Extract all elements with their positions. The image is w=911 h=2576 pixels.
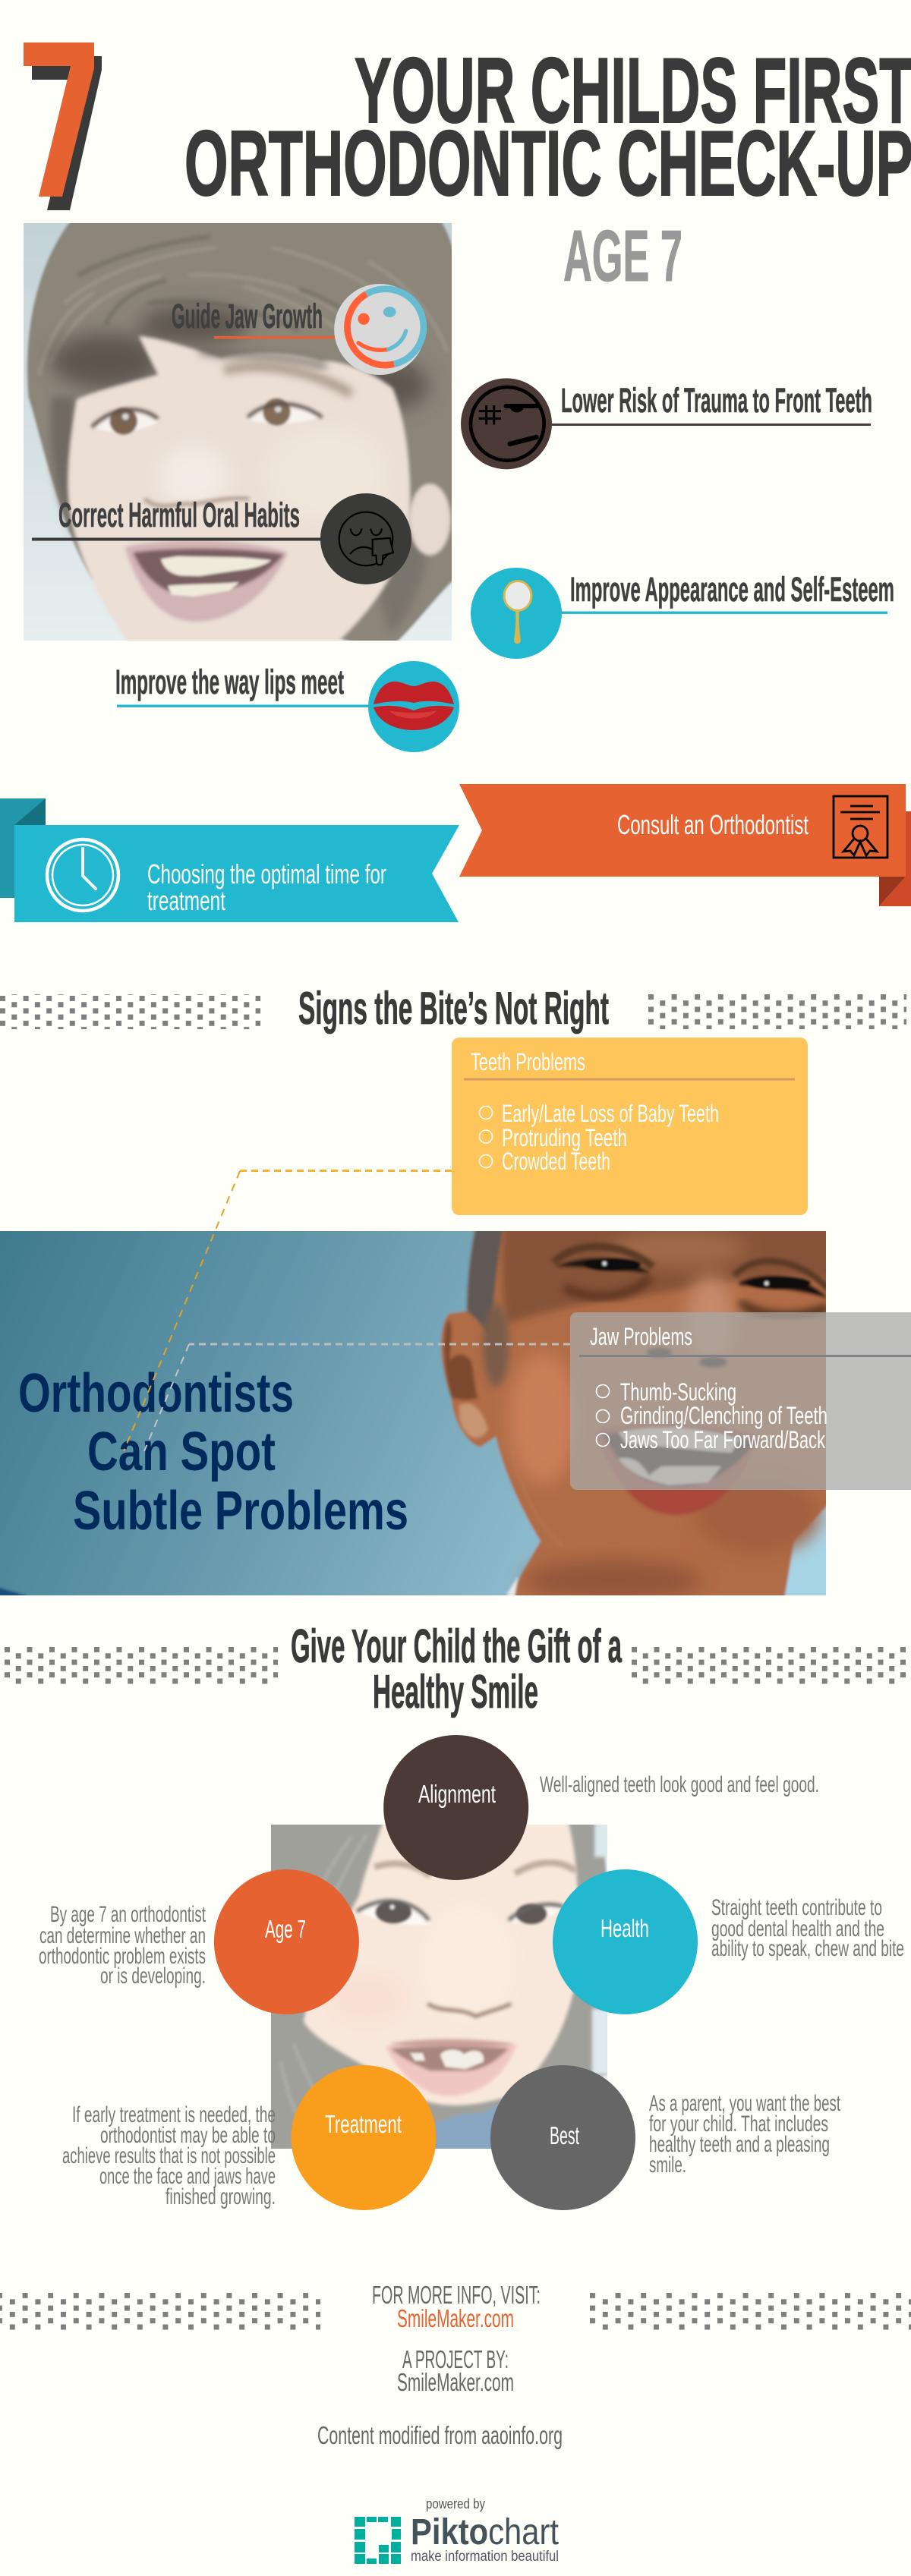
text: age 7 description: orthodontic problem exists: [39, 1944, 206, 1969]
heading: give your child the gift of a healthy smile: Give Your Child the Gift of a: [291, 1620, 622, 1673]
photo: boy: [0, 1216, 841, 1611]
logo: piktochart: powered by: [426, 2496, 485, 2511]
big number 7: [24, 43, 102, 210]
footer: more info: FOR MORE INFO, VISIT:: [372, 2281, 541, 2309]
text: treatment description: finished growing.: [165, 2184, 276, 2209]
footer: more info: SmileMaker.com: [397, 2304, 514, 2332]
footer dots: [0, 2293, 911, 2330]
item: improve the way lips meet: Improve the way lips meet: [115, 663, 344, 701]
bullet list: Thumb-Sucking: [620, 1378, 736, 1406]
item: improve the way lips meet: [115, 661, 459, 752]
mouth: [125, 540, 288, 622]
circle: alignment: [383, 1735, 528, 1880]
brows: [374, 1863, 430, 1876]
ribbon: choosing the optimal time: [0, 798, 459, 922]
nose and mouth: [595, 1274, 758, 1515]
circle: treatment: Treatment: [325, 2110, 402, 2138]
text: treatment description: once the face and jaws have: [99, 2164, 276, 2189]
bullet list: Grinding/Clenching of Teeth: [620, 1402, 827, 1429]
text: health description: [711, 1895, 904, 1961]
footer: content source: Content modified from aaoinfo.org: [317, 2421, 563, 2449]
bullet list: Crowded Teeth: [502, 1148, 610, 1175]
mouth: [386, 2039, 516, 2096]
circle: alignment: Alignment: [418, 1780, 496, 1808]
heading: signs the bite's not right: Signs the Bite’s Not Right: [298, 983, 609, 1034]
left eye: [92, 408, 159, 435]
logo: piktochart: make information beautiful: [411, 2549, 559, 2565]
text: best description: [649, 2091, 840, 2178]
footer: project credit: A PROJECT BY:: [402, 2345, 509, 2373]
icon: hurt face: [461, 378, 552, 469]
logo: piktochart: [355, 2496, 559, 2565]
text: age 7 description: [39, 1902, 206, 1989]
icon: thumbs down face: [320, 493, 411, 584]
photo caption: [18, 1363, 408, 1542]
text: best description: smile.: [649, 2152, 686, 2178]
item: improve appearance and self-esteem: [471, 568, 894, 659]
bullet list: Protruding Teeth: [502, 1124, 627, 1151]
item: correct harmful oral habits: [32, 493, 411, 584]
text: age 7 description: By age 7 an orthodontist: [50, 1902, 206, 1927]
ribbon: consult an orthodontist: Consult an Orthodontist: [617, 809, 809, 840]
photo caption: Subtle Problems: [73, 1481, 408, 1542]
circle: health: [553, 1869, 698, 2014]
ribbon: choosing the optimal time: Choosing the optimal time for: [147, 858, 386, 890]
icon: piktochart mark: [355, 2517, 401, 2564]
circle: age 7: Age 7: [265, 1915, 306, 1943]
text: treatment description: orthodontist may be able to: [100, 2123, 276, 2148]
panel: jaw problems: Jaw Problems: [590, 1323, 692, 1350]
right eye: [247, 398, 323, 426]
bullet list: [597, 1378, 827, 1453]
text: treatment description: If early treatment is needed, the: [72, 2102, 276, 2127]
ribbon: consult an orthodontist: [459, 784, 911, 906]
photo caption: Can Spot: [87, 1422, 276, 1482]
icon: hand mirror: [471, 568, 562, 659]
text: age 7 description: or is developing.: [100, 1963, 206, 1989]
circle: treatment: [292, 2065, 436, 2210]
footer: project credit: [397, 2345, 514, 2396]
text: treatment description: achieve results that is not possible: [62, 2143, 276, 2168]
title: [184, 39, 911, 215]
heading: give your child the gift of a healthy smile: Healthy Smile: [373, 1666, 538, 1718]
item: lower risk of trauma: [461, 378, 872, 469]
logo: piktochart: Piktochart: [411, 2512, 559, 2552]
circle: health: Health: [601, 1914, 649, 1942]
footer: more info: [372, 2281, 541, 2332]
panel: teeth problems: Teeth Problems: [471, 1048, 585, 1075]
circle: best: Best: [550, 2121, 579, 2149]
bullet list: Early/Late Loss of Baby Teeth: [502, 1100, 719, 1127]
circle: best: [490, 2065, 635, 2210]
item: guide jaw growth: [172, 284, 425, 375]
photo: smiling girl: [271, 1825, 607, 2149]
item: guide jaw growth: Guide Jaw Growth: [172, 297, 323, 335]
text: treatment description: [62, 2102, 276, 2209]
photo caption: Orthodontists: [18, 1363, 294, 1424]
ribbon: choosing the optimal time: treatment: [147, 885, 225, 916]
panel: jaw problems: [144, 1312, 911, 1490]
footer: project credit: SmileMaker.com: [397, 2368, 514, 2396]
subtitle: age 7: AGE 7: [563, 216, 682, 297]
heading: signs the bite's not right: [0, 983, 906, 1034]
icon: clock: [47, 839, 118, 911]
eyes: [357, 1901, 563, 1925]
heading: give your child the gift of a healthy smile: [5, 1620, 911, 1718]
bullet list: [480, 1100, 719, 1175]
photo: smiling boy: [24, 223, 452, 641]
eyes: [553, 1246, 828, 1315]
circle: age 7: [214, 1869, 359, 2014]
item: correct harmful oral habits: Correct Harmful Oral Habits: [58, 496, 300, 534]
nose: [427, 2004, 511, 2017]
icon: certificate: [834, 796, 887, 858]
panel: teeth problems: [124, 1038, 808, 1451]
text: age 7 description: can determine whether an: [39, 1923, 206, 1948]
icon: lips: [368, 661, 459, 752]
icon: smiley: [334, 284, 425, 375]
